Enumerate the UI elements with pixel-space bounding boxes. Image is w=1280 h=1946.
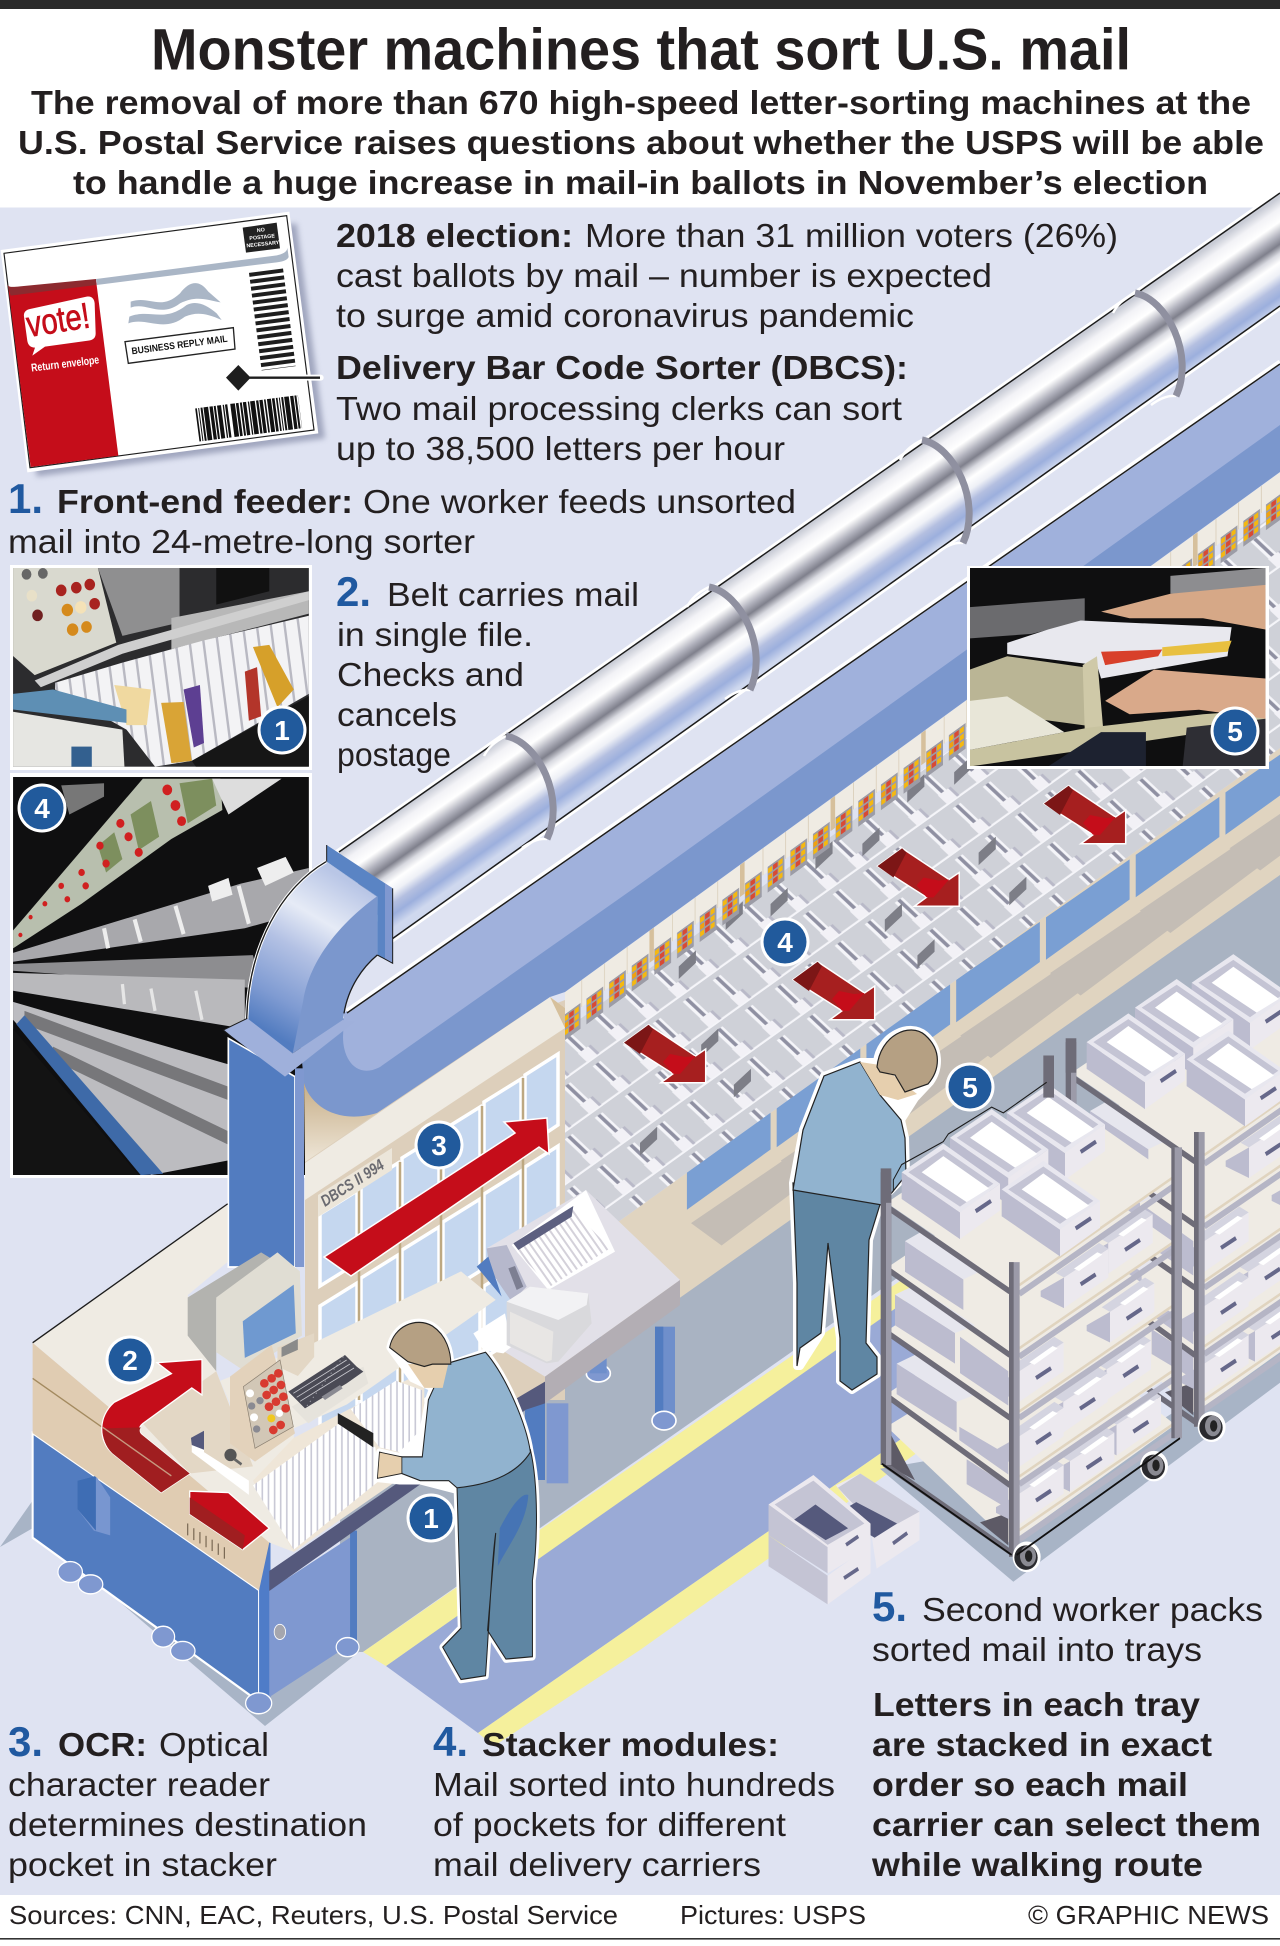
stacker wall: panels and skirting <box>565 748 1280 1379</box>
control panel <box>230 1345 295 1462</box>
text: step 2: cancels <box>337 697 457 734</box>
worker 1 <box>377 1322 536 1680</box>
control panel and keyboard <box>230 1345 368 1462</box>
badge: 3 OCR <box>414 1120 464 1170</box>
text: step 3: OCR: <box>58 1727 147 1764</box>
no postage indicia <box>243 223 280 253</box>
text: step 3: 3. <box>8 1718 43 1765</box>
text: step 4: Stacker modules: <box>482 1727 779 1764</box>
text: step 4: mail delivery carriers <box>433 1847 761 1884</box>
keyboard <box>288 1355 368 1423</box>
red arrow: step 1 <box>190 1491 269 1550</box>
text: step 3: determines destination <box>8 1807 367 1844</box>
machine top <box>33 1204 496 1590</box>
text: step 3: character reader <box>8 1767 270 1804</box>
mail bundle <box>473 1287 592 1363</box>
speech bubble: vote! <box>24 294 92 345</box>
red arrow: step 2 <box>102 1359 202 1493</box>
stacker bays <box>687 672 1280 1245</box>
pipe <box>339 193 1280 939</box>
footer: Sources: CNN, EAC, Reuters, U.S. Postal Service <box>9 1900 618 1930</box>
title: Monster machines that sort U.S. mail <box>151 18 1131 82</box>
badge: 4 stacker: 4 <box>777 927 793 958</box>
text: step 1: mail into 24-metre-long sorter <box>8 524 475 561</box>
text: step 2: in single file. <box>337 617 533 654</box>
arrows on machine <box>102 1359 269 1559</box>
text: step 4: Mail sorted into hundreds <box>433 1767 835 1804</box>
worker 2 <box>793 1030 937 1390</box>
text: step 5: sorted mail into trays <box>872 1632 1202 1669</box>
sorter facade with DBCS label <box>304 997 565 1470</box>
upper duct <box>300 362 1280 1117</box>
text: DBCS: Delivery Bar Code Sorter (DBCS): <box>336 350 908 387</box>
letter stacks <box>253 1424 379 1550</box>
table with mail holder <box>473 1190 680 1483</box>
text: step 1: One worker feeds unsorted <box>363 484 796 521</box>
text: step 1: 1. <box>8 475 43 522</box>
top surface <box>33 1204 294 1552</box>
text: step 5 <box>872 1583 1263 1669</box>
text: letters in each tray: while walking route <box>871 1847 1203 1884</box>
machine base <box>33 1381 547 1714</box>
text: 2018 election: cast ballots by mail – number is expected <box>336 258 992 295</box>
badge: 1 feeder <box>406 1494 456 1542</box>
business reply mail box <box>125 328 235 363</box>
top rule <box>0 0 1280 9</box>
text: step 3 <box>8 1718 367 1884</box>
empty trays on floor <box>769 1474 919 1604</box>
chute <box>487 1245 527 1302</box>
business reply mail box: BUSINESS REPLY MAIL <box>131 334 228 357</box>
no postage indicia: NECESSARY <box>246 240 280 249</box>
badge: 3 OCR: 3 <box>431 1130 447 1161</box>
machine floor shadow <box>0 1500 359 1726</box>
beige front <box>33 1343 269 1590</box>
text: step 4 <box>433 1718 835 1884</box>
sorted letters in holder <box>512 1190 615 1290</box>
barcode <box>197 412 300 425</box>
return envelope <box>1 212 325 477</box>
text: DBCS: up to 38,500 letters per hour <box>336 431 785 468</box>
table top <box>487 1190 680 1377</box>
text: step 5: Second worker packs <box>922 1592 1263 1629</box>
return envelope: Return envelope <box>31 354 100 375</box>
text: DBCS: Two mail processing clerks can sort <box>336 391 903 428</box>
badge: 1 feeder: 1 <box>423 1503 439 1534</box>
text: 2018 election: to surge amid coronavirus pandemic <box>336 298 914 335</box>
subtitle: U.S. Postal Service raises questions about whether the USPS will be able <box>18 125 1264 162</box>
text: step 4: 4. <box>433 1718 468 1765</box>
no postage indicia: NO <box>257 227 265 234</box>
front trolley <box>881 1055 1182 1572</box>
badge: 5 worker <box>946 1062 994 1112</box>
diamond pointer <box>226 365 321 391</box>
text: letters in each tray <box>871 1687 1261 1884</box>
mail trolleys <box>880 954 1280 1582</box>
text: letters in each tray: are stacked in exact <box>872 1727 1212 1764</box>
badge: 1 photo: 1 <box>274 715 290 746</box>
floor and walkway <box>340 860 1280 1746</box>
text: letters in each tray: carrier can select them <box>872 1807 1261 1844</box>
text: step 2: Checks and <box>337 657 524 694</box>
magnifier icon <box>224 1449 242 1464</box>
text: step 2: Belt carries mail <box>387 577 639 614</box>
text: step 1 <box>8 475 796 561</box>
photo 5: hands sorting mail <box>967 566 1269 769</box>
text: step 2: 2. <box>336 568 371 615</box>
trolley shadow <box>880 1344 1280 1582</box>
paddle <box>338 1413 373 1447</box>
text: step 5: 5. <box>872 1583 907 1630</box>
badge: 5 photo <box>1210 706 1260 756</box>
no postage indicia: POSTAGE <box>249 233 276 242</box>
stacker tabs <box>640 756 1026 1155</box>
footer: Pictures: USPS <box>680 1900 866 1930</box>
badge: 5 photo: 5 <box>1227 716 1243 747</box>
vent grille <box>188 1523 224 1559</box>
facing bars <box>266 271 279 368</box>
badge: 4 stacker <box>760 918 810 966</box>
badge: 5 worker: 5 <box>962 1072 978 1103</box>
subtitle <box>18 85 1264 202</box>
rear trolley <box>1066 954 1280 1442</box>
badge: 2 belt <box>106 1336 154 1384</box>
text: step 3: pocket in stacker <box>8 1847 277 1884</box>
photo 1: front-end feeder <box>10 565 312 770</box>
footer <box>0 1895 1280 1946</box>
badge: 2 belt: 2 <box>122 1345 138 1376</box>
text: 2018 election: More than 31 million voters (26%) <box>585 218 1118 255</box>
text: 2018 election: 2018 election: <box>336 218 573 255</box>
text: step 4: of pockets for different <box>433 1807 787 1844</box>
table legs <box>525 1327 676 1483</box>
duct elbow and column <box>223 845 393 1267</box>
badge: 4 photo <box>18 784 66 832</box>
text: letters in each tray: order so each mail <box>872 1767 1188 1804</box>
stacker indicator strip <box>565 472 1280 1040</box>
subtitle: to handle a huge increase in mail-in ballots in November’s election <box>73 165 1208 202</box>
text: letters in each tray: Letters in each tray <box>873 1687 1200 1724</box>
text: step 2 <box>336 568 639 774</box>
text: 2018 election <box>336 218 1118 335</box>
footer: © GRAPHIC NEWS <box>1028 1900 1269 1930</box>
red arrows: sort direction <box>624 786 1126 1083</box>
badge: 1 photo <box>258 706 306 754</box>
monitor <box>188 1252 314 1376</box>
photo 4: stacker modules <box>10 773 312 1178</box>
text: step 2: postage <box>337 737 451 774</box>
red arrow: step 3 <box>324 1118 549 1276</box>
text: step 1: Front-end feeder: <box>57 484 353 521</box>
text: step 3: Optical <box>159 1727 269 1764</box>
logo waves <box>128 283 222 324</box>
stacker modules <box>565 510 1280 1260</box>
text: DBCS <box>336 350 908 468</box>
badge: 4 photo: 4 <box>34 793 50 824</box>
sorter facade with DBCS label: DBCS II 994 <box>318 1157 388 1210</box>
subtitle: The removal of more than 670 high-speed letter-sorting machines at the <box>31 85 1251 122</box>
